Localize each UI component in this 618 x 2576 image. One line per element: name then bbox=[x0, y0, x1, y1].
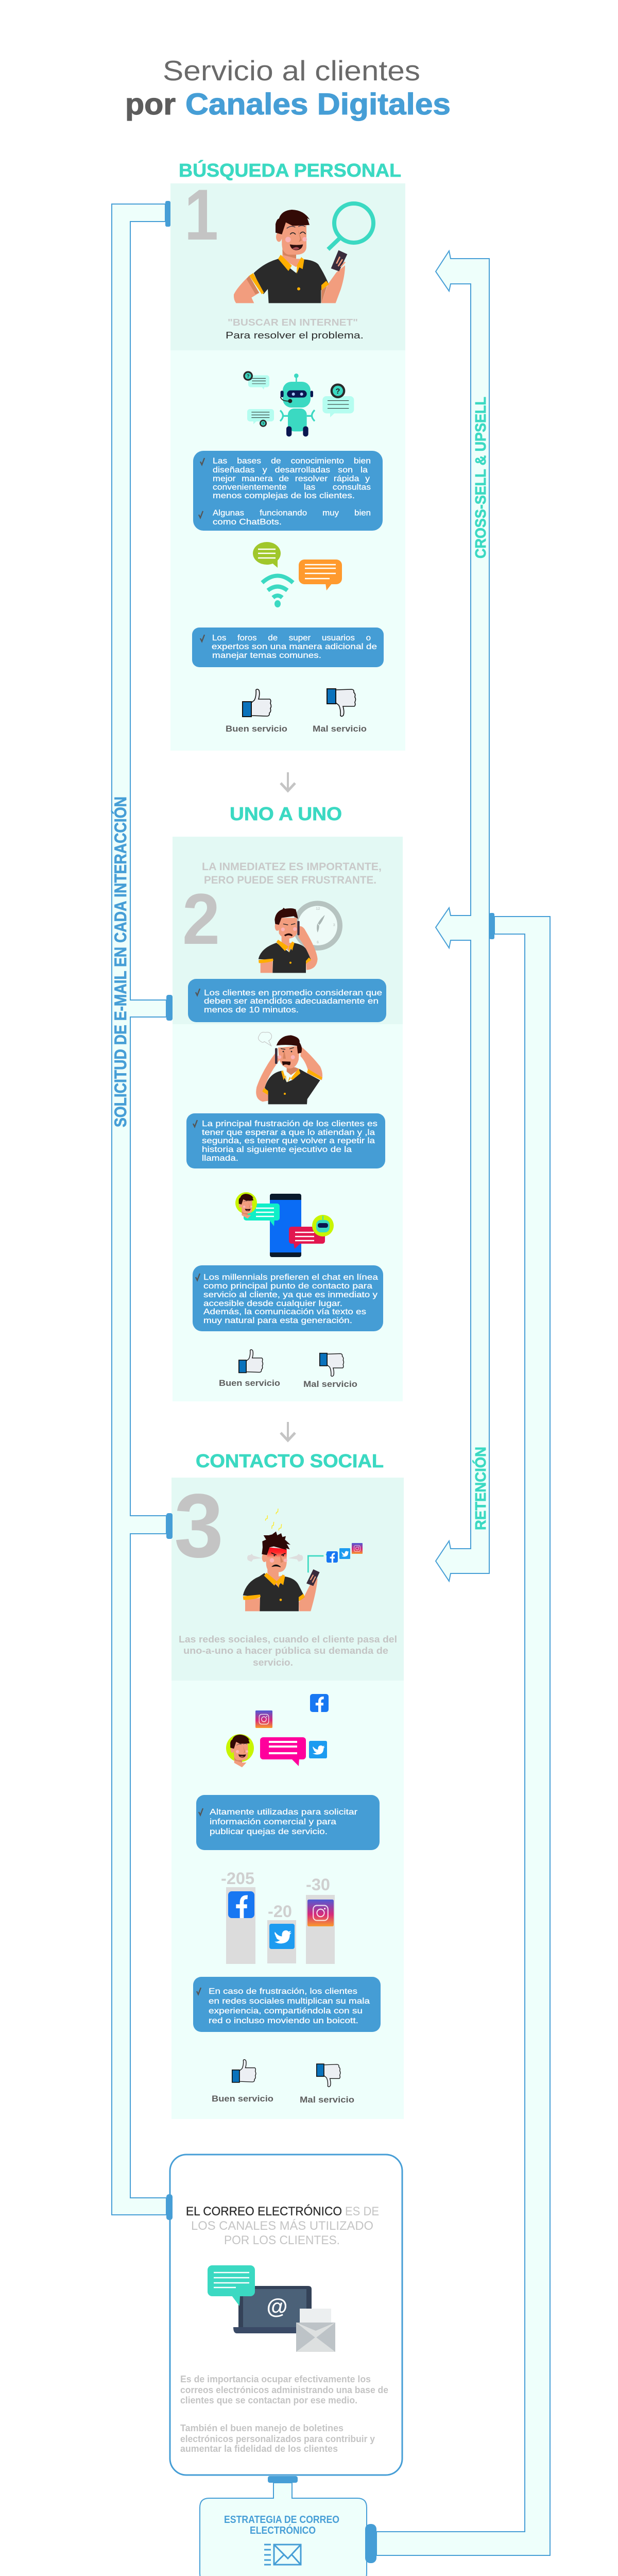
bar chart: social reach: -30 bbox=[306, 1875, 330, 1894]
illustration: man on phone with clock: 6 bbox=[317, 940, 319, 944]
right pipe with arrows: cross-sell and retención: CROSS-SELL & UPSELL bbox=[473, 397, 489, 558]
callout: foros: Los foros de super usuarios o bbox=[212, 634, 371, 642]
title: Canales Digitales bbox=[185, 88, 451, 121]
callout: altamente utilizadas: información comercial y para bbox=[210, 1818, 336, 1826]
section heading: búsqueda personal: BÚSQUEDA PERSONAL bbox=[179, 159, 401, 181]
section heading: contacto social: CONTACTO SOCIAL bbox=[196, 1450, 384, 1471]
left pipe: solicitud de e-mail: SOLICITUD DE E-MAIL EN CADA INTERACCIÓN bbox=[111, 796, 130, 1127]
callout: principal frustración: La principal frustración de los clientes es bbox=[202, 1120, 377, 1128]
caption: "BUSCAR EN INTERNET" bbox=[228, 317, 358, 328]
panel: uno a uno bbox=[173, 837, 403, 1401]
bar chart: social reach bbox=[221, 1869, 335, 1964]
icon cluster: social media and avatar bbox=[226, 1694, 329, 1767]
title: Servicio al clientes bbox=[163, 55, 420, 87]
title bbox=[125, 55, 451, 121]
callout: bases de conocimiento: como ChatBots. bbox=[213, 518, 282, 527]
icon: thumbs and service labels bbox=[219, 1350, 357, 1389]
number 2: 2 bbox=[182, 878, 220, 959]
callout: millennials: como principal punto de contacto para bbox=[203, 1282, 372, 1291]
text block: clientes que se contactan por ese medio. bbox=[180, 2395, 357, 2405]
callout: foros: expertos son una manera adicional de bbox=[212, 642, 377, 651]
callout: millennials: muy natural para esta generación. bbox=[203, 1316, 352, 1325]
heading: POR LOS CLIENTES. bbox=[224, 2233, 340, 2247]
illustration: angry man with social icons bbox=[243, 1509, 328, 1611]
illustration: chatbot: ? bbox=[262, 422, 264, 426]
callout: 10 minutos: deben ser atendidos adecuadamente en bbox=[204, 997, 379, 1006]
callout: bases de conocimiento: Las bases de conocimiento bien bbox=[213, 456, 371, 466]
icon: magnifier bbox=[328, 204, 373, 249]
section heading: uno a uno: UNO A UNO bbox=[230, 803, 342, 824]
text block: También el buen manejo de boletines bbox=[180, 2423, 344, 2433]
arrow: to contacto social bbox=[281, 1422, 295, 1440]
callout: bases de conocimiento: convenientemente las consultas bbox=[213, 483, 371, 492]
icon: thumbs and service labels: Mal servicio bbox=[303, 1379, 357, 1389]
illustration: smiling man with phone bbox=[234, 210, 347, 303]
heading bbox=[186, 2205, 379, 2247]
panel: contacto social bbox=[171, 1476, 404, 2119]
text: redes sociales: servicio. bbox=[253, 1657, 293, 1668]
arrow: to uno a uno bbox=[281, 772, 295, 791]
illustration: man on phone with clock: 3 bbox=[333, 922, 335, 927]
icon: small social icons bbox=[327, 1543, 363, 1563]
panel: búsqueda personal bbox=[170, 174, 405, 751]
illustration: man on phone with clock bbox=[259, 903, 340, 973]
connector caps bbox=[165, 201, 494, 2576]
number 1: 1 bbox=[184, 174, 218, 255]
callout: foros bbox=[192, 628, 384, 667]
icon: thumbs and service labels: Mal servicio bbox=[300, 2095, 354, 2105]
heading text bbox=[202, 861, 382, 886]
callout: 10 minutos: Los clientes en promedio consideran que bbox=[204, 989, 382, 997]
bar chart: social reach: -205 bbox=[221, 1869, 254, 1888]
heading: LOS CANALES MÁS UTILIZADO bbox=[191, 2219, 373, 2233]
text block bbox=[180, 2374, 388, 2454]
panel: estrategia de correo electrónico bbox=[200, 2483, 367, 2576]
caption: Para resolver el problema. bbox=[226, 330, 364, 341]
right pipe with arrows: cross-sell and retención bbox=[436, 251, 489, 1581]
text block: aumentar la fidelidad de los clientes bbox=[180, 2444, 338, 2454]
icon: thumbs and service labels: Buen servicio bbox=[226, 724, 287, 734]
illustration: man on phone with clock: 12 bbox=[316, 906, 320, 911]
callout: frustración: experiencia, compartiéndola con su bbox=[209, 2007, 363, 2015]
text: redes sociales: Las redes sociales, cuando el cliente pasa del bbox=[179, 1634, 397, 1645]
right pipe with arrows: cross-sell and retención: RETENCIÓN bbox=[472, 1447, 489, 1530]
title: por bbox=[125, 88, 176, 121]
callout: principal frustración bbox=[186, 1113, 385, 1168]
callout: millennials: accesible desde cualquier lugar. bbox=[203, 1299, 342, 1308]
text: redes sociales: uno-a-uno a hacer pública su demanda de bbox=[183, 1646, 388, 1656]
heading text: PERO PUEDE SER FRUSTRANTE. bbox=[204, 874, 376, 886]
illustration: phone chat bbox=[235, 1192, 334, 1257]
illustration: laptop email: @ bbox=[267, 2294, 287, 2318]
icon: chat bubbles and wifi bbox=[253, 542, 342, 607]
callout: millennials: Además, la comunicación vía texto es bbox=[203, 1308, 366, 1316]
text: redes sociales bbox=[179, 1634, 397, 1668]
bar chart: social reach: -20 bbox=[268, 1902, 292, 1921]
callout: bases de conocimiento: menos complejas de los clientes. bbox=[213, 492, 355, 500]
panel: correo electrónico bbox=[170, 2155, 402, 2475]
callout: 10 minutos bbox=[188, 979, 386, 1022]
heading: EL CORREO ELECTRÓNICO bbox=[186, 2205, 342, 2218]
callout: frustración: red o incluso moviendo un boicott. bbox=[209, 2016, 358, 2025]
callout: bases de conocimiento: mejor manera de resolver rápida y bbox=[213, 474, 370, 483]
callout: frustración: en redes sociales multiplican su mala bbox=[209, 1997, 370, 2006]
callout: millennials bbox=[193, 1265, 383, 1331]
callout: altamente utilizadas: publicar quejas de servicio. bbox=[210, 1827, 328, 1836]
callout: bases de conocimiento: Algunas funcionando muy bien bbox=[213, 509, 371, 517]
callout: foros: manejar temas comunes. bbox=[212, 651, 321, 660]
text block: electrónicos personalizados para contribuir y bbox=[180, 2434, 375, 2444]
icon: thumbs and service labels: Mal servicio bbox=[313, 724, 367, 734]
callout: principal frustración: tener que esperar a que lo atiendan y ,la bbox=[202, 1128, 375, 1137]
callout: millennials: Los millennials prefieren el chat en línea bbox=[203, 1273, 378, 1282]
callout: frustración bbox=[193, 1977, 381, 2032]
panel: estrategia de correo electrónico: ESTRATEGIA DE CORREO bbox=[224, 2514, 339, 2526]
illustration: chatbot: ? bbox=[247, 374, 250, 379]
icon: thumbs and service labels bbox=[212, 2060, 354, 2105]
text block: correos electrónicos administrando una base de bbox=[180, 2385, 388, 2395]
heading: ES DE bbox=[345, 2205, 379, 2218]
callout: principal frustración: segunda, es tener que volver a repetir la bbox=[202, 1137, 375, 1145]
text block: Es de importancia ocupar efectivamente los bbox=[180, 2374, 371, 2384]
caption bbox=[226, 317, 364, 341]
callout: bases de conocimiento bbox=[193, 451, 383, 531]
illustration: chatbot bbox=[243, 371, 354, 436]
panel: estrategia de correo electrónico: ELECTRÓNICO bbox=[250, 2524, 316, 2536]
callout: millennials: servicio al cliente, ya que es inmediato y bbox=[203, 1291, 377, 1299]
callout: principal frustración: llamada. bbox=[202, 1154, 238, 1163]
icon: envelope bbox=[264, 2545, 301, 2565]
number 3: 3 bbox=[174, 1476, 224, 1577]
illustration: laptop email bbox=[208, 2265, 335, 2352]
callout: frustración: En caso de frustración, los clientes bbox=[209, 1987, 357, 1996]
icon: thumbs and service labels: Buen servicio bbox=[212, 2094, 273, 2104]
icon: thumbs and service labels bbox=[226, 689, 367, 734]
heading text: LA INMEDIATEZ ES IMPORTANTE, bbox=[202, 861, 382, 873]
left pipe: solicitud de e-mail bbox=[111, 204, 166, 2215]
illustration: frustrated man bbox=[256, 1032, 322, 1104]
outer right pipe bbox=[376, 917, 550, 2555]
callout: altamente utilizadas: Altamente utilizadas para solicitar bbox=[210, 1808, 358, 1817]
callout: bases de conocimiento: diseñadas y desarrolladas son la bbox=[213, 466, 368, 474]
callout: altamente utilizadas bbox=[196, 1795, 380, 1850]
callout: principal frustración: historia al siguiente ejecutivo de la bbox=[202, 1145, 352, 1154]
illustration: chatbot: ? bbox=[336, 387, 340, 396]
icon: thumbs and service labels: Buen servicio bbox=[219, 1378, 280, 1388]
callout: 10 minutos: menos de 10 minutos. bbox=[204, 1006, 299, 1014]
